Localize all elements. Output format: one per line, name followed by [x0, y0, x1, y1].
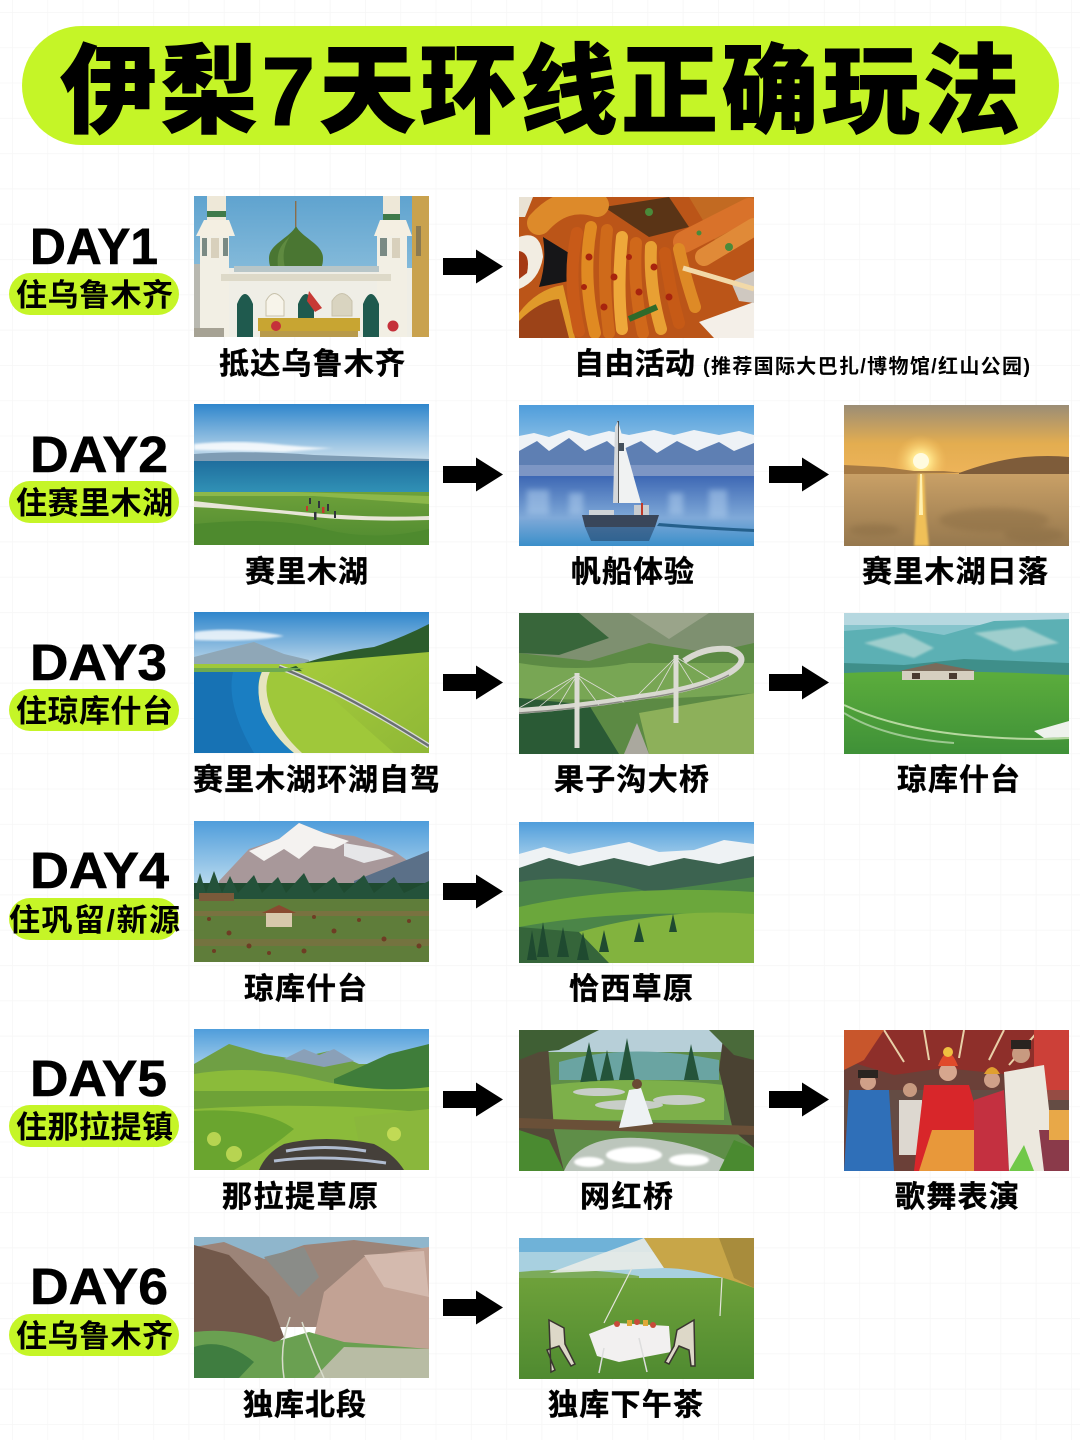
day 6 heading: DAY6	[30, 1258, 168, 1315]
panel: day 5	[9, 1029, 1069, 1214]
photo: lake loop road	[194, 612, 429, 753]
caption: 独库下午茶	[548, 1389, 703, 1422]
panel: day 3	[9, 612, 1069, 797]
photo: song and dance show	[844, 1030, 1069, 1171]
arrow	[443, 874, 503, 908]
photo: Sayram Lake shore	[194, 404, 429, 545]
photo: influencer bridge	[519, 1030, 754, 1171]
day 1 heading: DAY1	[30, 218, 158, 275]
arrow	[443, 1290, 503, 1324]
caption: 独库北段	[243, 1389, 366, 1422]
photo: Qiongkushtai pasture	[844, 613, 1069, 754]
caption: 歌舞表演	[895, 1181, 1019, 1214]
caption with note: 自由活动	[574, 348, 695, 381]
arrow	[443, 1082, 503, 1116]
panel: day 2	[9, 404, 1069, 589]
arrow	[769, 1082, 829, 1116]
photo: Qiaxi grassland	[519, 822, 754, 963]
caption: 那拉提草原	[222, 1181, 378, 1214]
panel: day 4	[9, 821, 754, 1006]
caption: 抵达乌鲁木齐	[219, 348, 405, 381]
day 5 heading: DAY5	[30, 1050, 167, 1107]
photo: Nalati grassland	[194, 1029, 429, 1170]
caption: 果子沟大桥	[554, 764, 709, 797]
day 4 stay badge: 住巩留/新源	[9, 903, 180, 938]
photo: spicy noodles	[519, 197, 754, 338]
photo: Duku north section	[194, 1237, 429, 1378]
caption: 琼库什台	[897, 763, 1020, 797]
day 5 stay badge: 住那拉提镇	[16, 1110, 173, 1145]
caption: 恰西草原	[569, 973, 693, 1006]
caption: 赛里木湖	[245, 556, 368, 589]
photo: snow mountain and cattle	[194, 821, 429, 962]
day 6 stay badge: 住乌鲁木齐	[16, 1319, 173, 1354]
arrow	[769, 458, 829, 492]
day 2 stay badge: 住赛里木湖	[16, 486, 173, 521]
title banner: 伊梨7天环线正确玩法	[60, 37, 1020, 146]
caption: 赛里木湖环湖自驾	[193, 764, 440, 797]
day 3 heading: DAY3	[30, 634, 167, 691]
caption with note	[574, 348, 1030, 381]
arrow	[443, 666, 503, 700]
photo: afternoon tea camp	[519, 1238, 754, 1379]
panel: day 6	[9, 1237, 754, 1422]
caption: 网红桥	[580, 1181, 673, 1214]
caption: 赛里木湖日落	[862, 556, 1048, 589]
arrow	[443, 250, 503, 284]
caption: 帆船体验	[571, 556, 694, 589]
arrow	[443, 458, 503, 492]
day 1 stay badge: 住乌鲁木齐	[16, 278, 173, 313]
day 4 heading: DAY4	[30, 842, 170, 899]
day 3 stay badge: 住琼库什台	[16, 694, 173, 729]
panel: day 1	[9, 196, 1030, 381]
day 2 heading: DAY2	[30, 426, 168, 483]
photo: mosque	[194, 196, 429, 337]
caption: 琼库什台	[244, 972, 367, 1006]
photo: Guozigou bridge	[519, 613, 754, 754]
photo: lake sunset	[844, 405, 1069, 546]
photo: sailboat	[519, 405, 754, 546]
arrow	[769, 666, 829, 700]
caption with note: (推荐国际大巴扎/博物馆/红山公园)	[703, 355, 1030, 378]
